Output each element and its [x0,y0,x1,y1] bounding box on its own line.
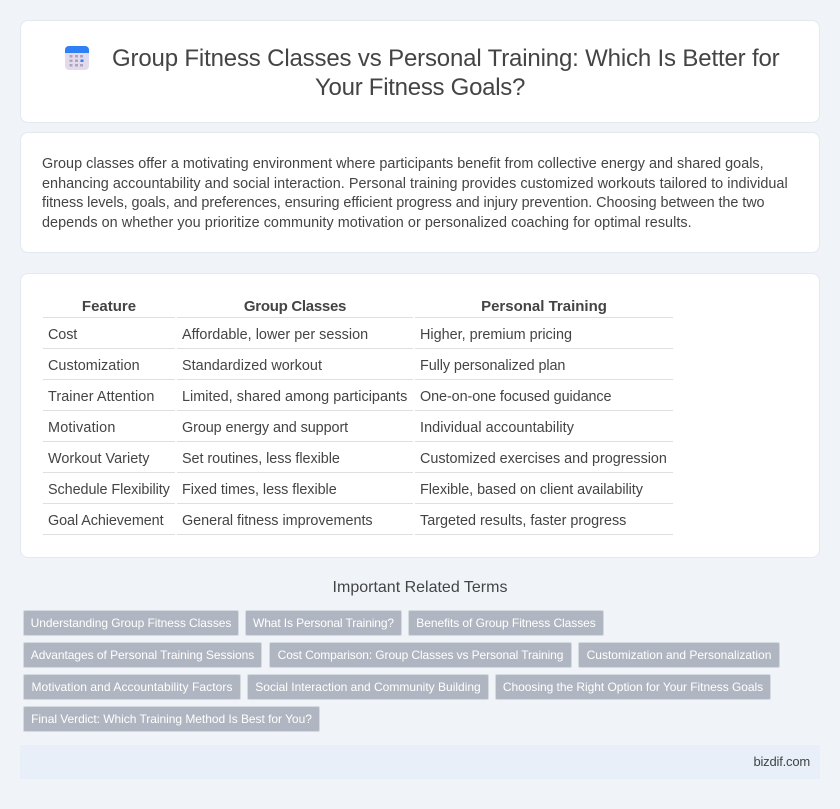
tag [23,674,241,700]
row: workout variety: Set routines, less flexible [182,451,340,467]
row: customization: Fully personalized plan [420,358,565,374]
row: schedule flexibility: Fixed times, less flexible [182,482,337,498]
intro text: fitness levels, goals, and preferences, ensuring efficient progress and injury prevention. Choosing between the two [42,195,765,211]
row: workout variety [48,451,667,467]
row: cost: Cost [48,327,77,343]
tag: Cost Comparison: Group Classes vs Personal Training [278,648,563,662]
row: goal achievement: General fitness improvements [182,513,373,529]
tag [269,642,572,668]
tag: Motivation and Accountability Factors [31,680,233,694]
tag: Choosing the Right Option for Your Fitness Goals [503,680,763,694]
row: motivation: Group energy and support [182,420,348,436]
row: schedule flexibility: Flexible, based on client availability [420,482,643,498]
footer bar [20,745,820,779]
row: workout variety: Workout Variety [48,451,150,467]
panel: comparison table [20,273,820,558]
tag [247,674,489,700]
tag: Benefits of Group Fitness Classes [416,616,596,630]
comparison table [43,298,673,535]
icon: calendar [65,46,89,70]
row: cost: Affordable, lower per session [182,327,368,343]
title [112,45,780,101]
intro text: depends on whether you prioritize community motivation or personalized coaching for optimal results. [42,214,692,230]
tag [245,610,402,636]
row: trainer attention: Trainer Attention [48,389,154,405]
row: cost: Higher, premium pricing [420,327,572,343]
tag [23,610,239,636]
row: customization: Standardized workout [182,358,322,374]
row: goal achievement: Goal Achievement [48,513,164,529]
row: trainer attention [48,389,611,405]
column headings: Personal Training [481,298,607,315]
footer site name: bizdif.com [753,754,810,769]
tag [23,642,262,668]
column headings [82,298,607,315]
row: customization [48,358,565,374]
tag: Customization and Personalization [587,648,771,662]
tag: Advantages of Personal Training Sessions [31,648,254,662]
title: Group Fitness Classes vs Personal Training: Which Is Better for [112,45,780,72]
related terms heading: Important Related Terms [333,579,507,596]
row: workout variety: Customized exercises and progression [420,451,667,467]
tag [578,642,780,668]
title: Your Fitness Goals? [315,74,525,101]
row: goal achievement [48,513,626,529]
tag: Understanding Group Fitness Classes [31,616,231,630]
intro text: Group classes offer a motivating environment where participants benefit from collective energy and shared goals, [42,156,764,172]
row: motivation: Individual accountability [420,420,574,436]
row: schedule flexibility [48,482,643,498]
intro text [42,156,788,230]
tag [23,706,320,732]
row: schedule flexibility: Schedule Flexibility [48,482,170,498]
tag: Social Interaction and Community Building [255,680,481,694]
header panel [20,20,820,123]
row: trainer attention: One-on-one focused guidance [420,389,611,405]
row: trainer attention: Limited, shared among participants [182,389,407,405]
row: goal achievement: Targeted results, faster progress [420,513,626,529]
row: motivation [48,420,574,436]
tag: Final Verdict: Which Training Method Is Best for You? [31,712,312,726]
tag [408,610,604,636]
row: customization: Customization [48,358,140,374]
column headings: Feature [82,298,136,315]
tag [495,674,771,700]
tag: What Is Personal Training? [253,616,394,630]
row: motivation: Motivation [48,420,116,436]
column headings: Group Classes [244,298,346,315]
related term tags [23,610,780,732]
row: cost [48,327,572,343]
panel: introduction [20,132,820,253]
intro text: enhancing accountability and social interaction. Personal training provides customized workouts tailored to individual [42,176,788,192]
